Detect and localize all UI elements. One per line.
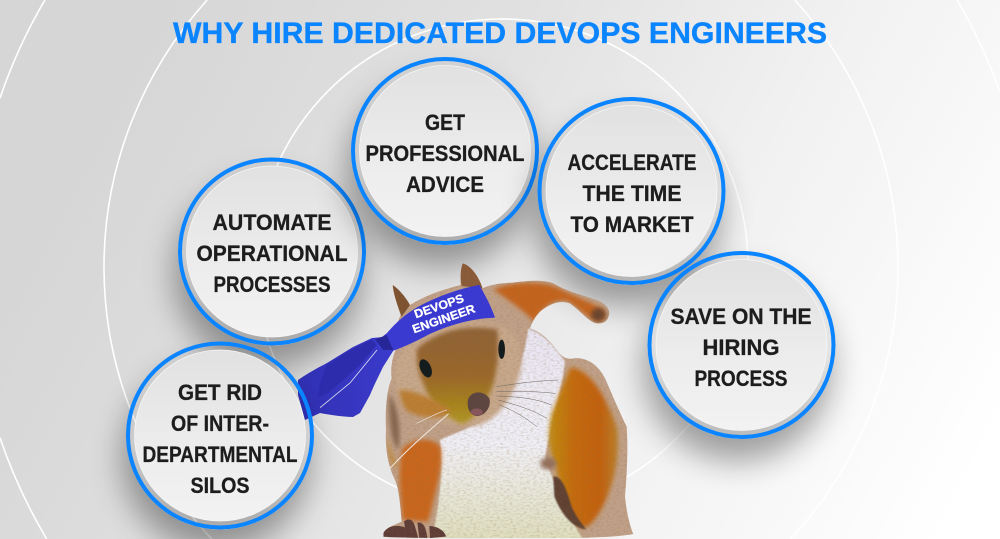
circle: save on the hiring process: HIRING (702, 335, 780, 360)
squirrel mascot with headband (298, 260, 640, 539)
circle: get professional advice: PROFESSIONAL (366, 141, 524, 166)
ears (393, 285, 410, 317)
circle: get rid of inter-departmental silos: OF INTER- (171, 411, 269, 436)
circle: accelerate the time to market (538, 97, 726, 285)
left flank stripes (387, 393, 399, 467)
whiskers (390, 380, 558, 468)
head fur (400, 355, 524, 428)
front paw (383, 519, 446, 538)
circle: get rid of inter-departmental silos (126, 342, 314, 530)
chest (432, 328, 583, 539)
circle: get rid of inter-departmental silos: DEPARTMENTAL (142, 442, 298, 467)
circle: save on the hiring process (648, 251, 836, 439)
headband: DEVOPS (412, 291, 466, 321)
circle: automate operational processes: PROCESSES (214, 272, 330, 297)
circle: save on the hiring process: PROCESS (694, 366, 788, 391)
eyes (417, 340, 505, 379)
circle: automate operational processes: AUTOMATE (212, 210, 332, 235)
brown spot on belly (540, 457, 556, 469)
right thigh (549, 367, 618, 527)
circle: accelerate the time to market: THE TIME (582, 181, 682, 206)
circle: automate operational processes: OPERATIONAL (196, 241, 348, 266)
circle: accelerate the time to market: TO MARKET (570, 212, 694, 237)
upper arm (493, 283, 605, 322)
headband: ENGINEER (410, 301, 477, 336)
forehead and muzzle (417, 328, 498, 424)
dark thigh shading (553, 477, 586, 529)
circle: get rid of inter-departmental silos: GET RID (178, 380, 262, 405)
paw of upper arm (591, 308, 606, 321)
circle: automate operational processes (178, 158, 366, 346)
fur texture (386, 280, 630, 538)
title: WHY HIRE DEDICATED DEVOPS ENGINEERS (173, 17, 827, 50)
left arm (400, 440, 441, 522)
circle: save on the hiring process: SAVE ON THE (670, 304, 812, 329)
circle: accelerate the time to market: ACCELERATE (568, 150, 696, 175)
circle: get rid of inter-departmental silos: SILOS (190, 473, 250, 498)
circle: get professional advice: GET (425, 110, 465, 135)
nose (468, 392, 490, 416)
circle: get professional advice: ADVICE (406, 172, 484, 197)
squirrel fur and body (373, 260, 640, 539)
lower left cheek (399, 390, 452, 418)
headband (375, 285, 495, 352)
circle: get professional advice (351, 57, 539, 245)
headband tails (298, 337, 395, 420)
